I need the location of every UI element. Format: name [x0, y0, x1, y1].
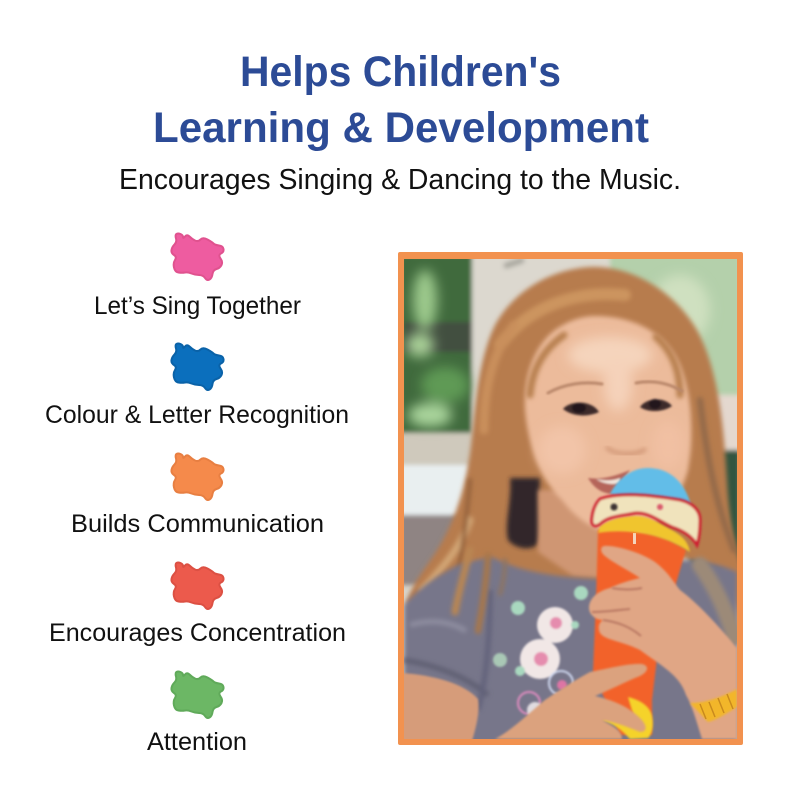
mic decorative band [592, 495, 700, 545]
mic end cap [598, 697, 653, 739]
shirt flowers [493, 586, 588, 718]
photo background [400, 255, 740, 739]
photo: girl singing into toy microphone [398, 252, 751, 745]
label: Builds Communication: Builds Communication [71, 510, 324, 538]
bracelet links [700, 694, 733, 719]
mic yellow collar [598, 516, 690, 552]
nose [606, 447, 646, 454]
upper hand [589, 546, 737, 739]
hairline strands at temples [530, 335, 680, 395]
label: Encourages Concentration: Encourages Concentration [49, 619, 346, 647]
band characters [610, 504, 618, 510]
hair strands over shirt [455, 550, 734, 637]
forehead and cheek light [532, 334, 654, 471]
face [525, 316, 691, 536]
mic white dash [633, 533, 636, 544]
shirt folds [404, 590, 490, 710]
eyes [563, 399, 672, 415]
left arm [402, 673, 479, 741]
icon: pink splat [171, 234, 224, 280]
mic body [593, 529, 686, 735]
neck [534, 488, 598, 578]
benefit list [45, 234, 349, 756]
hair [406, 267, 751, 642]
lower hand [495, 664, 647, 739]
icon: blue splat [171, 344, 224, 390]
title [153, 48, 649, 152]
icon: red splat [171, 562, 224, 609]
icon: green splat [171, 672, 224, 718]
label: Let's Sing Together: Let’s Sing Together [94, 292, 301, 320]
mouth [588, 470, 630, 494]
shirt [404, 557, 737, 745]
label: Colour & Letter Recognition: Colour & Letter Recognition [45, 401, 349, 429]
title: Learning & Development [153, 104, 649, 152]
mic head dome [610, 468, 691, 505]
yellow bracelet [690, 689, 737, 722]
icon: orange splat [171, 454, 224, 500]
dark hair shadow beside neck [507, 478, 541, 548]
photo frame [398, 252, 743, 745]
title: Helps Children's [240, 48, 561, 96]
finger shadows [592, 588, 642, 636]
photo scene [400, 255, 751, 745]
subtitle: Encourages Singing & Dancing to the Music. [119, 164, 681, 196]
hair highlights [422, 294, 734, 595]
label: Attention: Attention [147, 728, 247, 756]
microphone [592, 468, 700, 739]
eyebrows [548, 382, 682, 393]
